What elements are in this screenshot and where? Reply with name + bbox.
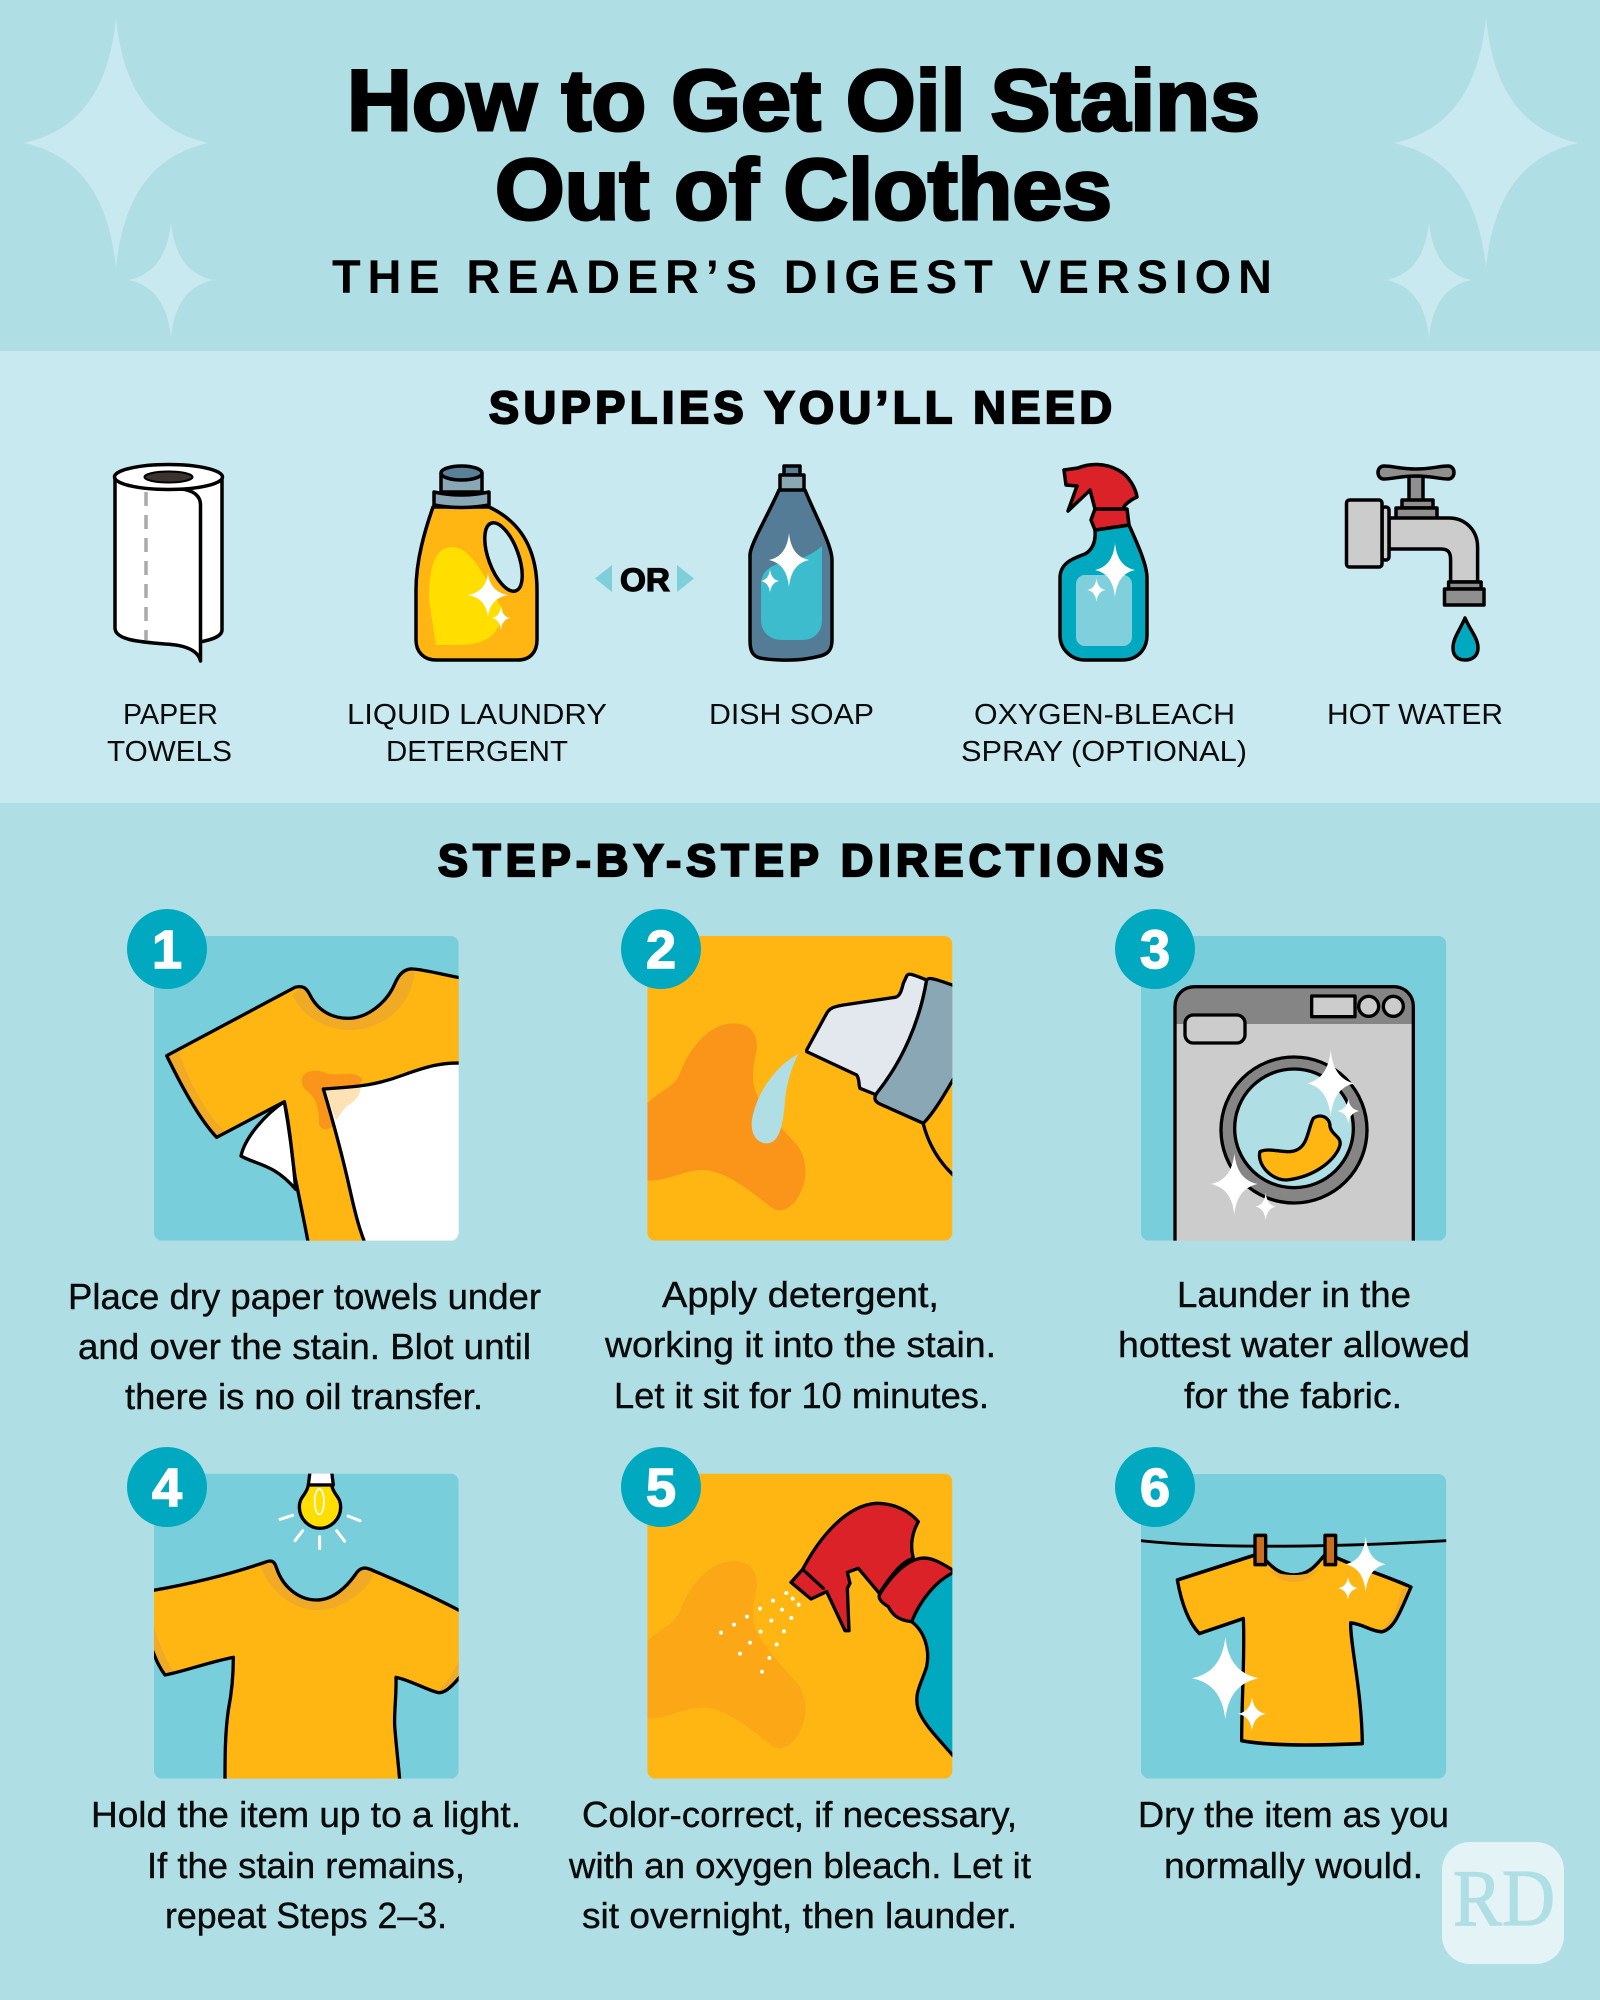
step 6 text: Dry the item as you: [1138, 1794, 1449, 1835]
step 1 text: there is no oil transfer.: [125, 1376, 483, 1417]
detergent label: DETERGENT: [386, 736, 568, 768]
step 5 text: with an oxygen bleach. Let it: [568, 1845, 1031, 1886]
step 6 badge: [1115, 1447, 1195, 1527]
icon: dish soap bottle: [750, 466, 832, 660]
step 5 badge: 5: [646, 1458, 676, 1518]
step 5 illustration: [647, 1474, 957, 1779]
step 4 text: If the stain remains,: [147, 1845, 465, 1886]
title: Out of Clothes: [495, 142, 1112, 238]
step 1 text: [68, 1276, 541, 1417]
step 4 text: Hold the item up to a light.: [91, 1794, 521, 1835]
step 2 badge: [621, 909, 701, 989]
step 4 illustration: [152, 1472, 462, 1783]
step 2 illustration: [647, 936, 957, 1241]
step 4 badge: 4: [152, 1458, 182, 1518]
RD logo: [1442, 1842, 1564, 1964]
step 2 text: Let it sit for 10 minutes.: [614, 1375, 989, 1416]
panel: directions: [0, 803, 1600, 2000]
detergent label: [347, 699, 607, 768]
title: How to Get Oil Stains: [347, 53, 1260, 149]
paper towels label: PAPER: [123, 699, 218, 731]
spray label: OXYGEN-BLEACH: [974, 699, 1235, 731]
step 3 text: [1118, 1274, 1470, 1416]
step 5 text: Color-correct, if necessary,: [582, 1794, 1017, 1835]
RD logo: RD: [1453, 1855, 1555, 1943]
step 3 text: for the fabric.: [1184, 1375, 1402, 1416]
supplies heading: SUPPLIES YOU’LL NEED: [489, 382, 1112, 433]
step 4 text: [91, 1794, 521, 1936]
step 2 badge: 2: [646, 920, 676, 980]
step 6 badge: 6: [1140, 1458, 1170, 1518]
step 3 illustration: [1141, 936, 1446, 1247]
or connector: [595, 562, 694, 598]
step 3 text: hottest water allowed: [1118, 1324, 1470, 1365]
detergent label: LIQUID LAUNDRY: [347, 699, 607, 731]
step 5 text: [568, 1794, 1031, 1936]
step 2 text: Apply detergent,: [662, 1274, 939, 1315]
dish soap label: DISH SOAP: [709, 699, 874, 731]
step 2 text: [604, 1274, 996, 1416]
title: [347, 53, 1260, 238]
step 3 text: Launder in the: [1177, 1274, 1411, 1315]
step 1 badge: 1: [152, 920, 182, 980]
step 6 text: normally would.: [1164, 1845, 1423, 1886]
step 2 text: working it into the stain.: [604, 1324, 996, 1365]
step 4 text: repeat Steps 2–3.: [165, 1895, 447, 1936]
step 6 illustration: [1141, 1474, 1446, 1779]
step 1 text: and over the stain. Blot until: [78, 1326, 531, 1367]
subtitle: THE READER’S DIGEST VERSION: [332, 250, 1272, 303]
hot water label: HOT WATER: [1327, 699, 1503, 731]
step 3 badge: 3: [1140, 920, 1170, 980]
step 3 badge: [1115, 909, 1195, 989]
step 5 text: sit overnight, then launder.: [582, 1895, 1017, 1936]
paper towels label: [107, 699, 232, 768]
panel: supplies: [0, 351, 1600, 803]
icon: oxygen bleach spray: [1060, 464, 1147, 660]
or connector: OR: [620, 562, 670, 598]
step 1 illustration: [154, 936, 463, 1243]
step 1 text: Place dry paper towels under: [68, 1276, 541, 1317]
paper towels label: TOWELS: [107, 736, 232, 768]
header band: [0, 0, 1600, 351]
step 6 text: [1138, 1794, 1449, 1886]
spray label: SPRAY (OPTIONAL): [961, 736, 1247, 768]
step 5 badge: [621, 1447, 701, 1527]
icon: detergent bottle: [416, 466, 537, 660]
icon: faucet: [1346, 466, 1484, 660]
step 1 badge: [127, 909, 207, 989]
spray label: [961, 699, 1247, 768]
decorative sparkles in header: [24, 18, 1578, 338]
icon: paper towels: [114, 464, 222, 661]
step 4 badge: [127, 1447, 207, 1527]
directions heading: STEP-BY-STEP DIRECTIONS: [438, 835, 1164, 886]
